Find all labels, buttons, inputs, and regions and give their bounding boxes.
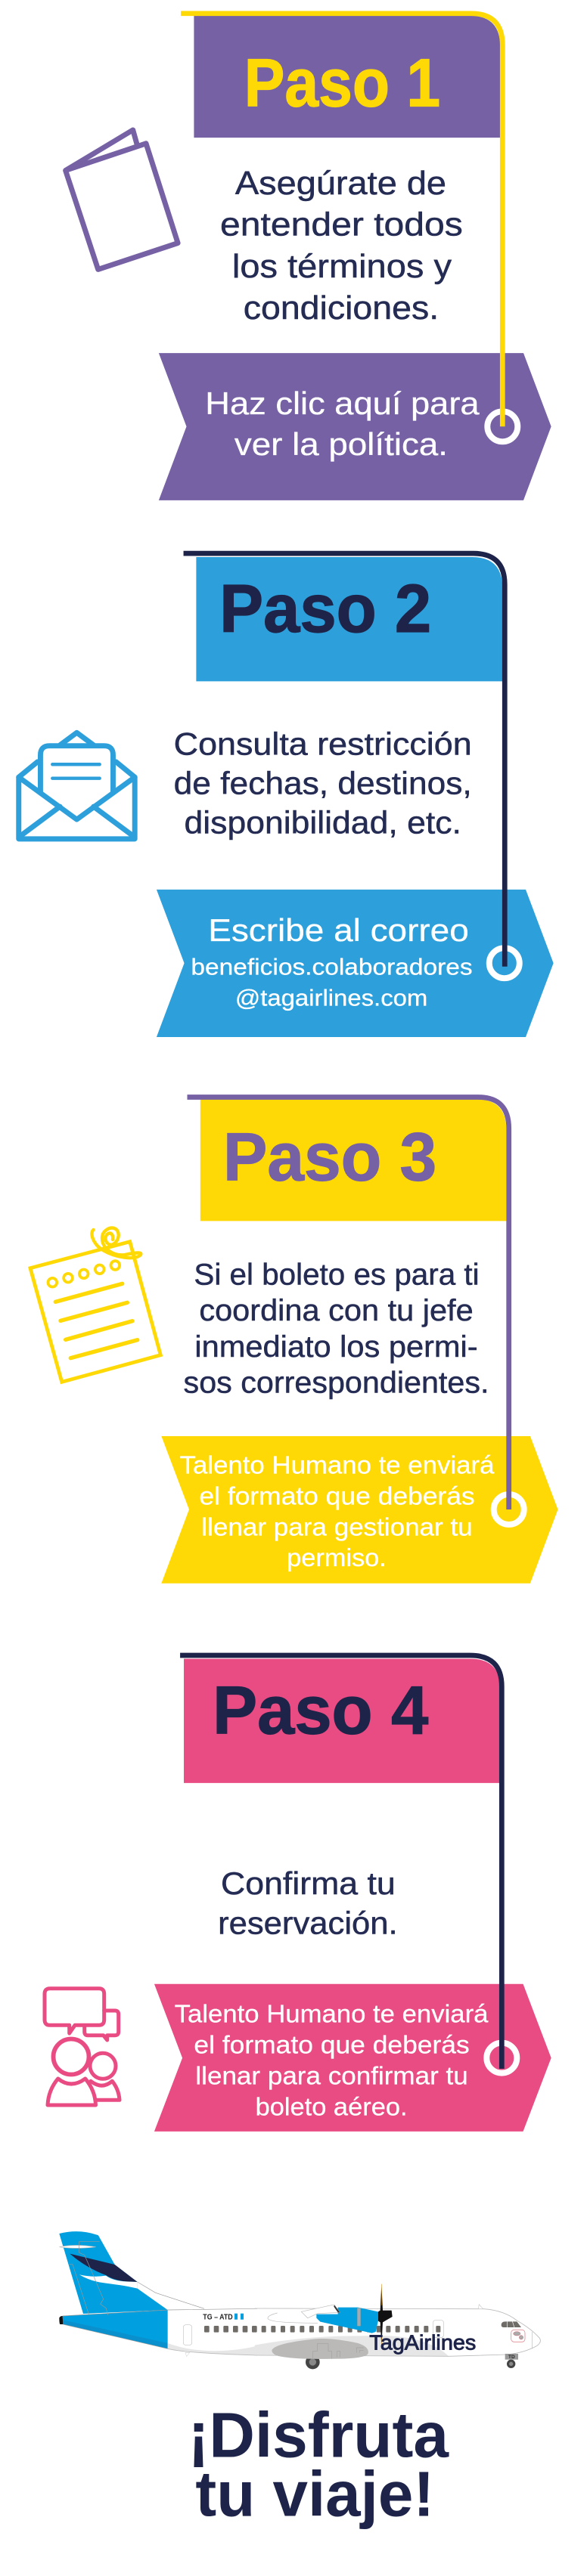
callout text: paso 4: el formato que deberás: [194, 2032, 470, 2060]
closing message: tu viaje!: [195, 2458, 434, 2529]
callout text: paso 1: [205, 385, 480, 462]
text: paso 4 instructions: reservación.: [218, 1906, 398, 1941]
illustration: TagAirlines plane: [59, 2231, 540, 2369]
plane body: [204, 2284, 540, 2369]
text: paso 3 instructions: Si el boleto es para ti: [194, 1258, 480, 1291]
propeller: [378, 2284, 393, 2345]
panel: paso 1: [66, 14, 551, 500]
callout text: paso 4: llenar para confirmar tu: [195, 2062, 468, 2090]
callout text: paso 1: ver la política.: [234, 426, 448, 462]
panel: paso 2: [19, 553, 554, 1037]
heading: paso 3: Paso 3: [223, 1119, 436, 1195]
panel: paso 3: [161, 1097, 558, 1584]
callout text: paso 3: [180, 1452, 495, 1572]
text: paso 3 instructions: coordina con tu jefe: [199, 1294, 474, 1327]
connector line: paso 1: [181, 14, 502, 426]
heading: paso 1: Paso 1: [244, 45, 440, 122]
connector line: paso 4: [180, 1655, 502, 2069]
heading: paso 2: Paso 2: [219, 571, 431, 647]
plane tail: [59, 2231, 257, 2357]
text: paso 2 instructions: Consulta restricción: [174, 726, 472, 761]
text: paso 1 instructions: condiciones.: [244, 290, 439, 327]
heading: paso 4: Paso 4: [213, 1673, 428, 1749]
airline name: TagAirlines: [369, 2330, 476, 2354]
callout text: paso 1: Haz clic aquí para: [205, 385, 480, 421]
callout text: paso 2: Escribe al correo: [208, 912, 469, 948]
connector line: paso 2: [184, 553, 505, 967]
text: paso 2 instructions: [174, 726, 472, 840]
icon: ring marker: [489, 948, 520, 978]
nose gear label: TD: [508, 2355, 515, 2360]
text: paso 2 instructions: disponibilidad, etc.: [185, 804, 461, 840]
text: paso 3 instructions: inmediato los permi-: [194, 1330, 478, 1364]
panel: paso 4: [154, 1655, 551, 2132]
callout arrow: paso 3: [161, 1436, 558, 1584]
callout text: paso 3: Talento Humano te enviará: [180, 1452, 495, 1480]
text: paso 3 instructions: [184, 1258, 489, 1400]
callout arrow: paso 2: [157, 890, 554, 1037]
text: paso 4 instructions: [218, 1865, 398, 1941]
icon: ring marker: [486, 2043, 517, 2073]
text: paso 1 instructions: Asegúrate de: [235, 166, 446, 202]
closing message: ¡Disfruta: [188, 2400, 449, 2471]
callout arrow: paso 1: [159, 353, 551, 500]
banner: paso 1: [194, 16, 500, 138]
nose logo: [511, 2330, 525, 2342]
callout text: paso 4: Talento Humano te enviará: [175, 2001, 489, 2029]
icon: booklet: [66, 130, 178, 269]
text: paso 1 instructions: entender todos: [220, 207, 463, 243]
icon: open envelope: [19, 732, 135, 839]
callout text: paso 3: permiso.: [287, 1544, 387, 1572]
callout text: paso 4: [175, 2001, 489, 2121]
banner: paso 4: [184, 1659, 500, 1783]
text: paso 2 instructions: de fechas, destinos,: [174, 765, 472, 800]
callout text: paso 2: [191, 912, 473, 1011]
connector line: paso 3: [188, 1097, 509, 1509]
icon: notepad with clip: [30, 1228, 160, 1382]
callout text: paso 2: @tagairlines.com: [235, 985, 427, 1011]
icon: people talking: [45, 1989, 120, 2105]
flag: [234, 2314, 244, 2320]
windows: [204, 2326, 440, 2333]
main landing gear: [306, 2355, 320, 2369]
nose gear: [505, 2354, 518, 2360]
icon: ring marker: [494, 1494, 524, 1525]
callout text: paso 4: boleto aéreo.: [256, 2093, 408, 2121]
cockpit: [502, 2321, 521, 2327]
text: paso 4 instructions: Confirma tu: [221, 1865, 396, 1901]
callout text: paso 3: el formato que deberás: [199, 1483, 475, 1511]
callout text: paso 3: llenar para gestionar tu: [201, 1513, 473, 1541]
closing message: [188, 2400, 449, 2529]
text: paso 1 instructions: [220, 166, 463, 327]
wing and engine: [268, 2313, 318, 2323]
banner: paso 2: [196, 557, 502, 681]
callout arrow: paso 4: [154, 1984, 551, 2132]
text: paso 1 instructions: los términos y: [232, 249, 452, 285]
callout text: paso 2: beneficios.colaboradores: [191, 953, 473, 980]
text: paso 3 instructions: sos correspondientes.: [184, 1367, 489, 1400]
registration: TG – ATD: [203, 2312, 233, 2321]
banner: paso 3: [200, 1099, 506, 1221]
icon: ring marker: [487, 411, 517, 441]
